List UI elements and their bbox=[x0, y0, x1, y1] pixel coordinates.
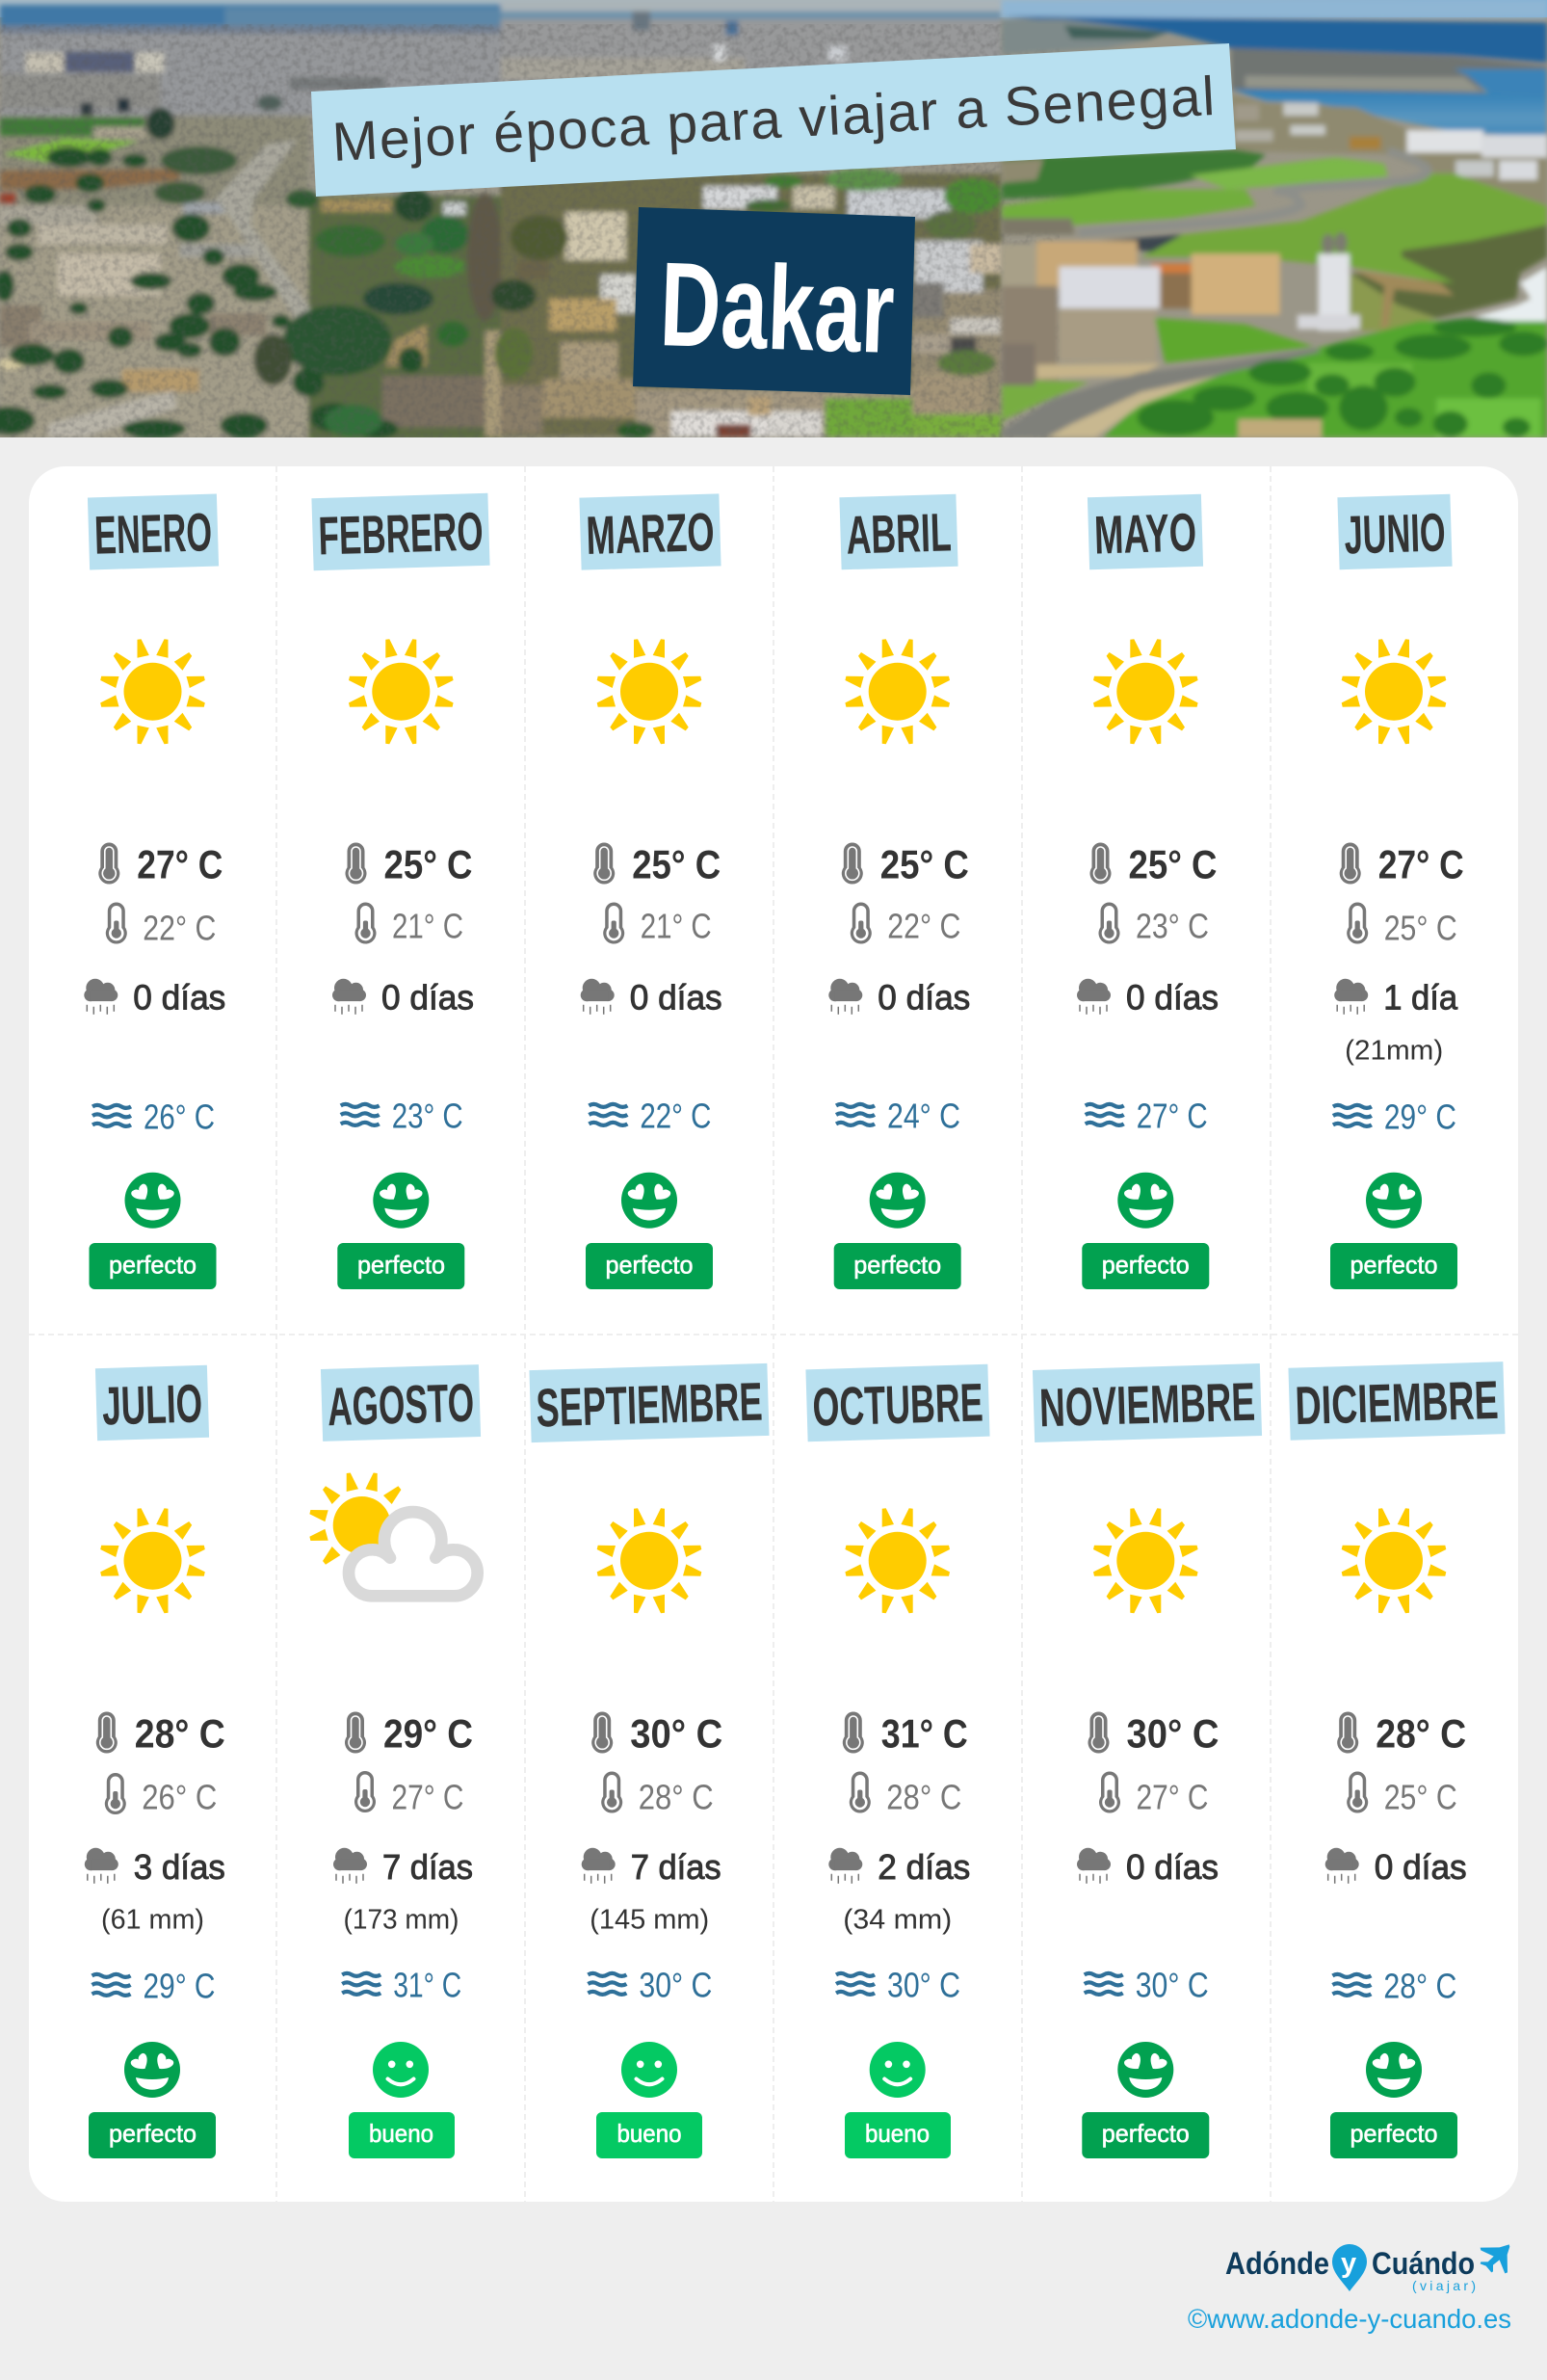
icon: thermometer max bbox=[96, 1711, 118, 1754]
rating badge bbox=[1082, 1243, 1209, 1289]
icon: sun bbox=[349, 639, 454, 744]
city texture bbox=[0, 24, 1060, 438]
rating badge: perfecto bbox=[1102, 2119, 1190, 2148]
icon: waves bbox=[1085, 1973, 1123, 1995]
cell: agosto bbox=[309, 1364, 481, 2158]
month label: noviembre: NOVIEMBRE bbox=[1038, 1371, 1256, 1438]
month label: febrero bbox=[311, 493, 490, 570]
icon: rain cloud bbox=[84, 979, 118, 1015]
website url: ©www.adonde-y-cuando.es bbox=[1188, 2304, 1511, 2334]
city banner: Dakar bbox=[633, 207, 915, 395]
rating badge: perfecto bbox=[605, 1250, 694, 1279]
logo: Adónde y Cuándo (viajar): Adónde bbox=[1225, 2246, 1329, 2281]
sea temperature: 30° C bbox=[1136, 1965, 1209, 2004]
month label: marzo bbox=[579, 493, 721, 570]
max temperature: 30° C bbox=[1127, 1710, 1219, 1756]
min temperature: 22° C bbox=[143, 908, 216, 947]
icon: waves bbox=[836, 1104, 875, 1125]
icon: map pin: y bbox=[1341, 2248, 1356, 2279]
rainy days: 3 días bbox=[134, 1847, 225, 1887]
icon: waves bbox=[1332, 1974, 1371, 1996]
rating badge bbox=[337, 1243, 464, 1289]
left part of photo bbox=[0, 5, 503, 440]
icon: thermometer min bbox=[1098, 902, 1119, 944]
month label: septiembre: SEPTIEMBRE bbox=[536, 1371, 763, 1438]
cell: abril bbox=[828, 494, 970, 1289]
rainfall amount: (21mm) bbox=[1345, 1036, 1443, 1067]
rating badge: perfecto bbox=[357, 1250, 445, 1279]
month label: agosto bbox=[321, 1364, 481, 1441]
cell: diciembre bbox=[1288, 1362, 1506, 2158]
icon: smiley perfect bbox=[621, 1173, 677, 1229]
rainfall amount: (61 mm) bbox=[101, 1905, 204, 1936]
month label: abril: ABRIL bbox=[846, 501, 952, 566]
icon: waves bbox=[589, 1104, 627, 1125]
icon: rain cloud bbox=[1334, 979, 1368, 1015]
icon: thermometer min bbox=[601, 1771, 622, 1813]
rainy days: 0 días bbox=[1126, 1847, 1219, 1887]
min temperature: 21° C bbox=[641, 907, 712, 946]
min temperature: 25° C bbox=[1384, 908, 1457, 947]
min temperature: 28° C bbox=[886, 1777, 961, 1816]
icon: sun bbox=[100, 1508, 205, 1613]
rating badge bbox=[349, 2112, 455, 2158]
rating badge bbox=[845, 2112, 951, 2158]
icon: smiley good bbox=[870, 2042, 926, 2098]
rating badge bbox=[834, 1243, 961, 1289]
panel: monthly climate table bbox=[29, 466, 1518, 2202]
max temperature: 28° C bbox=[1376, 1710, 1466, 1756]
icon: thermometer min bbox=[105, 1773, 126, 1814]
rating badge bbox=[586, 1243, 713, 1289]
rainy days: 0 días bbox=[1375, 1847, 1467, 1887]
icon: sun bbox=[597, 639, 701, 744]
icon: rain cloud bbox=[85, 1848, 118, 1884]
rating badge bbox=[1330, 1243, 1457, 1289]
rating badge bbox=[1082, 2112, 1209, 2158]
cell: mayo bbox=[1077, 494, 1219, 1289]
icon: smiley perfect bbox=[1117, 2042, 1173, 2098]
icon: smiley perfect bbox=[1117, 1173, 1173, 1229]
icon: thermometer min bbox=[354, 1771, 376, 1812]
icon: thermometer max bbox=[1088, 1711, 1110, 1754]
icon: thermometer max bbox=[843, 1711, 864, 1754]
icon: thermometer min bbox=[603, 902, 624, 944]
icon: sun bbox=[597, 1508, 701, 1613]
icon: thermometer max bbox=[842, 842, 863, 885]
month label: junio: JUNIO bbox=[1344, 501, 1446, 566]
cell: febrero bbox=[311, 493, 490, 1289]
title banner: Mejor época para viajar a Senegal: Mejor época para viajar a Senegal bbox=[330, 66, 1216, 173]
icon: thermometer max bbox=[593, 842, 615, 885]
sea temperature: 23° C bbox=[392, 1097, 463, 1136]
icon: thermometer min bbox=[106, 902, 127, 944]
icon: sun bbox=[845, 639, 950, 744]
icon: sun bbox=[100, 639, 205, 744]
icon: sun bbox=[1342, 639, 1446, 744]
icon: smiley perfect bbox=[870, 1173, 926, 1229]
rating badge: perfecto bbox=[109, 1250, 197, 1279]
sea temperature: 22° C bbox=[640, 1097, 711, 1136]
sea temperature: 29° C bbox=[143, 1966, 216, 2005]
min temperature: 27° C bbox=[391, 1777, 464, 1816]
logo: Adónde y Cuándo (viajar) bbox=[1225, 2244, 1509, 2293]
rating badge: bueno bbox=[865, 2119, 930, 2148]
rating badge: perfecto bbox=[1102, 1250, 1190, 1279]
icon: thermometer min bbox=[851, 902, 872, 944]
icon: waves bbox=[588, 1973, 626, 1995]
icon: thermometer max bbox=[1340, 842, 1361, 885]
icon: smiley good bbox=[621, 2042, 677, 2098]
max temperature: 25° C bbox=[632, 842, 721, 887]
icon: smiley perfect bbox=[1366, 1173, 1422, 1229]
rating badge: perfecto bbox=[109, 2119, 197, 2148]
icon: rain cloud bbox=[1325, 1848, 1359, 1884]
month label: marzo: MARZO bbox=[586, 501, 715, 566]
max temperature: 25° C bbox=[880, 842, 969, 887]
rainfall amount: (145 mm) bbox=[590, 1905, 709, 1936]
header photo: aerial view of Dakar bbox=[0, 0, 1547, 440]
title banner: Mejor época para viajar a Senegal bbox=[311, 43, 1236, 197]
rainy days: 0 días bbox=[381, 978, 474, 1018]
max temperature: 27° C bbox=[137, 842, 223, 887]
max temperature: 31° C bbox=[881, 1710, 968, 1756]
max temperature: 27° C bbox=[1378, 842, 1464, 887]
icon: thermometer min bbox=[1099, 1771, 1120, 1813]
rainy days: 0 días bbox=[878, 978, 970, 1018]
logo: Adónde y Cuándo (viajar): Cuándo bbox=[1372, 2246, 1475, 2281]
icon: sun bbox=[1342, 1508, 1446, 1613]
icon: smiley perfect bbox=[373, 1173, 429, 1229]
city banner: Dakar: Dakar bbox=[658, 238, 897, 379]
sea temperature: 30° C bbox=[639, 1965, 712, 2004]
icon: thermometer max bbox=[1090, 842, 1112, 885]
rating badge bbox=[1330, 2112, 1457, 2158]
min temperature: 27° C bbox=[1137, 1777, 1208, 1816]
icon: waves bbox=[92, 1974, 131, 1996]
icon: rain cloud bbox=[828, 979, 862, 1015]
right part of photo bbox=[1002, 0, 1547, 437]
footer: brand logo and website bbox=[1188, 2244, 1511, 2334]
cell: marzo bbox=[579, 493, 722, 1289]
icon: thermometer max bbox=[1337, 1711, 1358, 1754]
rating badge: bueno bbox=[369, 2119, 433, 2148]
rating badge: perfecto bbox=[1350, 1250, 1437, 1279]
icon: waves bbox=[836, 1973, 875, 1995]
icon: rain cloud bbox=[1077, 979, 1111, 1015]
icon: thermometer min bbox=[850, 1771, 871, 1813]
month label: noviembre bbox=[1033, 1363, 1262, 1442]
logo: Adónde y Cuándo (viajar): (viajar) bbox=[1412, 2278, 1476, 2293]
icon: waves bbox=[1333, 1105, 1372, 1126]
icon: thermometer max bbox=[345, 842, 366, 885]
rainy days: 0 días bbox=[133, 978, 225, 1018]
icon: map pin bbox=[1332, 2244, 1367, 2291]
icon: waves bbox=[92, 1105, 131, 1126]
icon: rain cloud bbox=[581, 979, 615, 1015]
rainy days: 0 días bbox=[630, 978, 722, 1018]
icon: thermometer max bbox=[591, 1711, 613, 1754]
icon: thermometer min bbox=[354, 902, 376, 944]
rainy days: 7 días bbox=[382, 1847, 473, 1887]
month label: enero bbox=[88, 494, 219, 569]
month label: junio bbox=[1337, 494, 1453, 569]
sea temperature: 31° C bbox=[393, 1965, 461, 2004]
rainfall amount: (173 mm) bbox=[343, 1905, 459, 1936]
rainfall amount: (34 mm) bbox=[843, 1905, 952, 1936]
month label: febrero: FEBRERO bbox=[318, 500, 484, 567]
icon: smiley good bbox=[373, 2042, 429, 2098]
min temperature: 26° C bbox=[142, 1777, 217, 1816]
rainy days: 7 días bbox=[631, 1847, 721, 1887]
max temperature: 29° C bbox=[383, 1710, 473, 1756]
icon: rain cloud bbox=[582, 1848, 616, 1884]
rainy days: 2 días bbox=[878, 1847, 970, 1887]
sea temperature: 27° C bbox=[1137, 1097, 1208, 1136]
rating badge bbox=[89, 2112, 216, 2158]
min temperature: 21° C bbox=[392, 907, 463, 946]
icon: smiley perfect bbox=[125, 1173, 181, 1229]
cell: septiembre bbox=[529, 1363, 770, 2158]
sea temperature: 24° C bbox=[887, 1097, 960, 1136]
icon: thermometer min bbox=[1347, 1771, 1368, 1813]
rainy days: 0 días bbox=[1126, 978, 1219, 1018]
icon: waves bbox=[342, 1973, 380, 1995]
min temperature: 22° C bbox=[887, 907, 960, 946]
icon: sun behind cloud bbox=[309, 1472, 478, 1596]
month label: julio: JULIO bbox=[101, 1372, 203, 1437]
rating badge: bueno bbox=[616, 2119, 682, 2148]
month label: mayo: MAYO bbox=[1093, 501, 1197, 566]
icon: sun bbox=[1093, 1508, 1198, 1613]
min temperature: 28° C bbox=[639, 1777, 714, 1816]
icon: thermometer max bbox=[345, 1711, 366, 1754]
min temperature: 25° C bbox=[1384, 1777, 1457, 1816]
rating badge: perfecto bbox=[1350, 2119, 1437, 2148]
month label: abril bbox=[839, 494, 958, 569]
icon: waves bbox=[1086, 1104, 1124, 1125]
icon: sun bbox=[845, 1508, 950, 1613]
rating badge bbox=[596, 2112, 702, 2158]
icon: rain cloud bbox=[1077, 1848, 1111, 1884]
max temperature: 25° C bbox=[1129, 842, 1218, 887]
sea temperature: 26° C bbox=[144, 1097, 215, 1137]
max temperature: 28° C bbox=[135, 1710, 225, 1756]
cell: julio bbox=[85, 1365, 225, 2158]
cell: noviembre bbox=[1033, 1363, 1262, 2158]
icon: rain cloud bbox=[333, 1848, 367, 1884]
sea temperature: 30° C bbox=[887, 1965, 960, 2004]
icon: thermometer min bbox=[1347, 902, 1368, 944]
min temperature: 23° C bbox=[1136, 907, 1209, 946]
icon: smiley perfect bbox=[1366, 2042, 1422, 2098]
month label: octubre bbox=[805, 1364, 990, 1441]
icon: rain cloud bbox=[828, 1848, 862, 1884]
cell: enero bbox=[84, 494, 225, 1289]
icon: smiley perfect bbox=[124, 2042, 180, 2098]
month label: agosto: AGOSTO bbox=[327, 1372, 475, 1437]
icon: waves bbox=[341, 1104, 380, 1125]
max temperature: 25° C bbox=[383, 842, 472, 887]
centre part of photo bbox=[491, 0, 1002, 438]
rating badge: perfecto bbox=[853, 1250, 941, 1279]
month label: enero: ENERO bbox=[93, 501, 213, 566]
month label: julio bbox=[95, 1365, 209, 1441]
icon: thermometer max bbox=[98, 842, 119, 885]
rainy days: 1 día bbox=[1383, 978, 1458, 1018]
icon: airplane bbox=[1481, 2244, 1509, 2273]
max temperature: 30° C bbox=[630, 1710, 722, 1756]
sea temperature: 28° C bbox=[1383, 1966, 1456, 2005]
month label: octubre: OCTUBRE bbox=[812, 1371, 983, 1438]
month label: mayo bbox=[1088, 494, 1203, 569]
cell: junio bbox=[1330, 494, 1464, 1289]
month label: septiembre bbox=[529, 1363, 770, 1442]
cell: octubre bbox=[805, 1364, 990, 2158]
rating badge bbox=[89, 1243, 216, 1289]
icon: sun bbox=[1093, 639, 1198, 744]
sea temperature: 29° C bbox=[1384, 1097, 1456, 1137]
icon: rain cloud bbox=[332, 979, 366, 1015]
